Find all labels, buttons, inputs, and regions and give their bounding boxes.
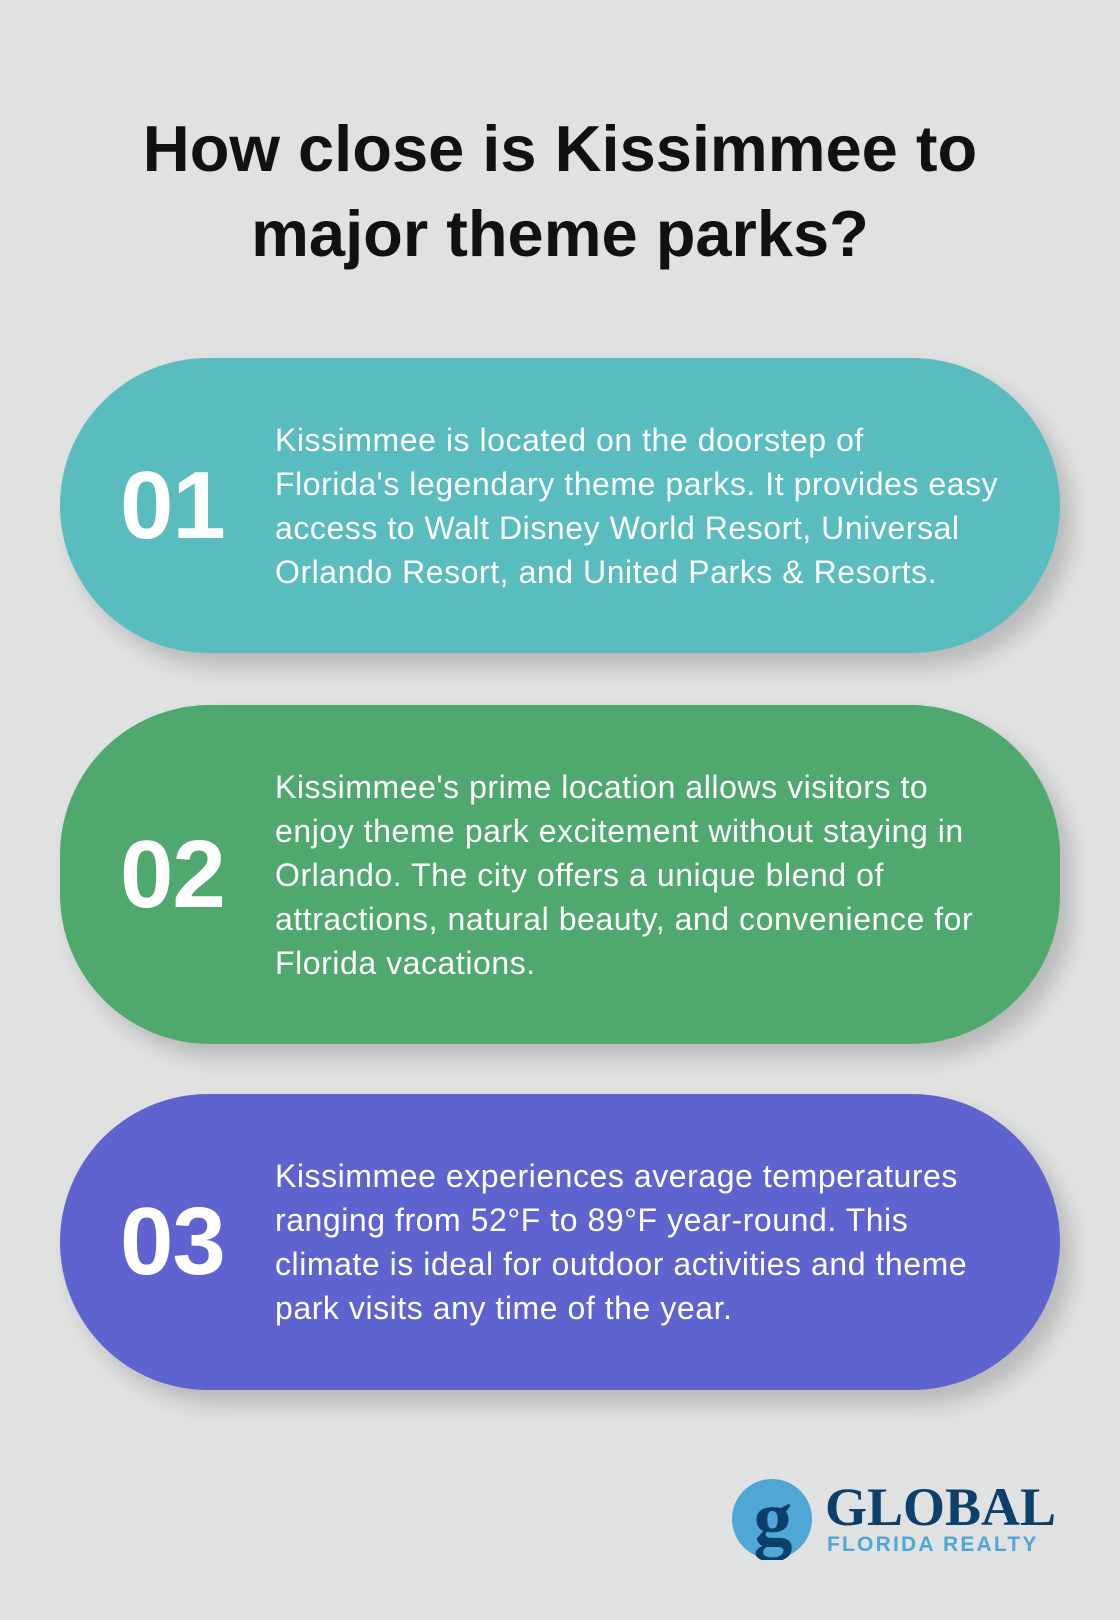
text 02: attractions, natural beauty, and convenience for: [275, 900, 973, 936]
logo text: GLOBAL: [825, 1477, 1056, 1537]
title: How close is Kissimmee to: [143, 112, 977, 185]
logo: FLORIDA REALTY: [827, 1533, 1039, 1556]
text 02: Florida vacations.: [275, 944, 536, 980]
text 01: Florida's legendary theme parks. It provides easy: [275, 466, 998, 502]
title: [143, 112, 977, 270]
text 01: Orlando Resort, and United Parks & Resorts.: [275, 554, 937, 590]
text 02: Kissimmee's prime location allows visitors to: [275, 768, 928, 804]
number 02: 02: [120, 820, 225, 928]
text 03: Kissimmee experiences average temperatures: [275, 1158, 958, 1194]
text 03: climate is ideal for outdoor activities and theme: [275, 1246, 967, 1282]
number 03: 03: [120, 1188, 225, 1295]
text 02: [275, 768, 973, 980]
panel: 03: [60, 1094, 1060, 1390]
text 01: access to Walt Disney World Resort, Universal: [275, 510, 960, 546]
text 02: enjoy theme park excitement without staying in: [275, 812, 964, 848]
logo: [732, 1477, 1056, 1560]
number 01: 01: [120, 452, 225, 558]
panel: 02: [60, 705, 1060, 1044]
icon: g circle: [732, 1478, 812, 1560]
panel: 01: [60, 358, 1060, 653]
text 01: Kissimmee is located on the doorstep of: [275, 422, 864, 458]
title: major theme parks?: [251, 197, 869, 270]
text 03: park visits any time of the year.: [275, 1290, 732, 1326]
text 03: [275, 1158, 967, 1326]
text 03: ranging from 52°F to 89°F year-round. This: [275, 1202, 908, 1238]
text 01: [275, 422, 998, 590]
text 02: Orlando. The city offers a unique blend of: [275, 856, 884, 892]
